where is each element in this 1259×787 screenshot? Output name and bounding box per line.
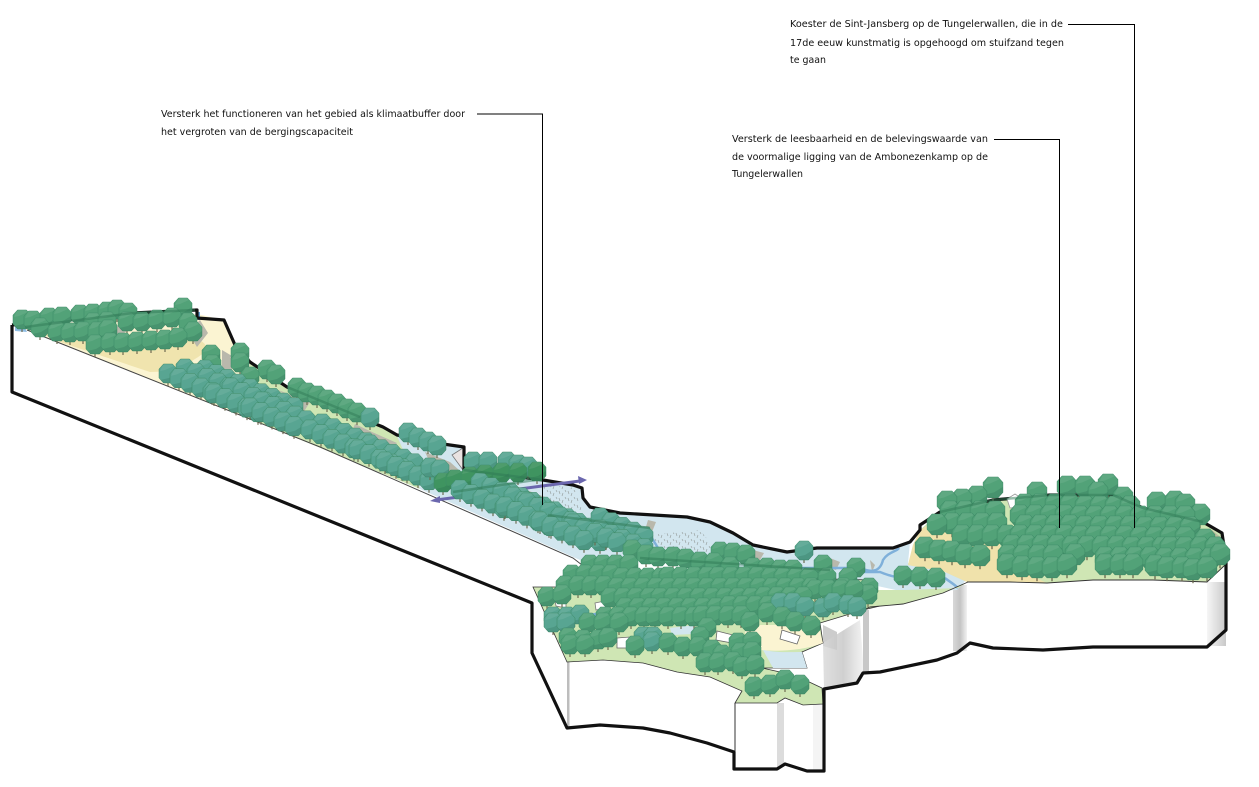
callout: Sint-Jansberg: te gaan [790, 55, 826, 66]
small houses [555, 494, 1026, 610]
trees: central forest [538, 540, 878, 629]
trees: left strip [13, 298, 366, 425]
trees: teal accent on central forest [544, 541, 866, 654]
ground: gravel banks and tree shadows [108, 320, 875, 572]
callout: Sint-Jansberg [790, 19, 1134, 528]
ground: right block [858, 495, 1225, 612]
ground: water basin [397, 436, 968, 592]
callout: Sint-Jansberg: 17de eeuw kunstmatig is opgehoogd om stuifzand tegen [790, 38, 1064, 49]
streams [650, 535, 958, 588]
trees: teal slope planting [159, 359, 537, 493]
callout: Ambonezenkamp: de voormalige ligging van de Ambonezenkamp op de [732, 152, 988, 163]
outer section outline [12, 310, 1226, 771]
trees: right forest [894, 474, 1230, 590]
callout: climate buffer [161, 109, 542, 505]
callout: Ambonezenkamp: Versterk de leesbaarheid en de belevingswaarde van [732, 134, 988, 145]
trees: teal lower slope [451, 473, 653, 561]
callout: Sint-Jansberg: Koester de Sint-Jansberg op de Tungelerwallen, die in de [790, 19, 1063, 30]
callout: climate buffer: het vergroten van de bergingscapaciteit [161, 127, 353, 138]
callout: Ambonezenkamp: Tungelerwallen [731, 169, 803, 180]
ground: central block [533, 572, 880, 705]
callout: climate buffer: Versterk het functioneren van het gebied als klimaatbuffer door [161, 109, 465, 120]
arrow: purple axis [430, 476, 587, 503]
trees: dark green row [434, 462, 546, 495]
ground: left slope [14, 312, 420, 489]
trees: central front [559, 603, 820, 699]
slope front edge [27, 330, 582, 565]
see-through back edge over trees [25, 310, 1203, 570]
central houses [617, 630, 800, 648]
triangular white marker [452, 448, 463, 470]
terrain cross-section faces [567, 582, 1226, 770]
callout: Ambonezenkamp [731, 134, 1060, 528]
